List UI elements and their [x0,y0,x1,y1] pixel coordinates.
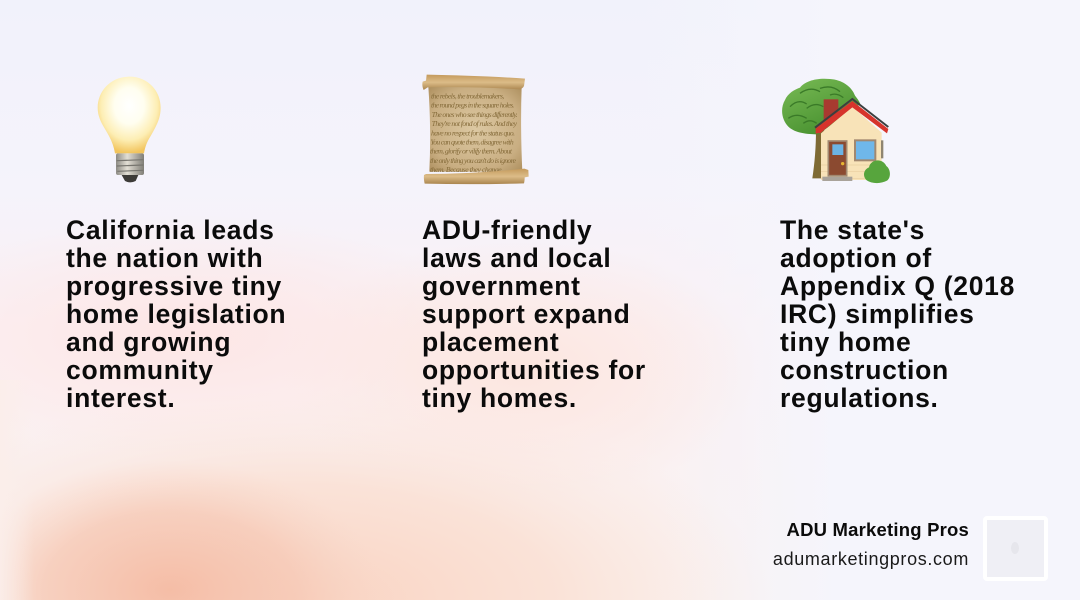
brand name: ADU Marketing Pros [787,519,969,540]
text block: Appendix Q: The state's [780,215,925,245]
text block: California: community [66,355,214,385]
text block: Appendix Q: IRC) simplifies [780,299,975,329]
logo placeholder [983,516,1048,581]
icon: parchment scroll: them, glorify or vilify them. About [430,147,513,156]
text block: California: the nation with [66,243,263,273]
icon: light bulb [98,76,161,182]
text block: ADU laws [422,215,646,413]
text block: Appendix Q: tiny home [780,327,911,357]
roof [816,101,888,134]
text block: California: California leads [66,215,275,245]
brand url: adumarketingpros.com [773,549,969,569]
icon: parchment scroll: them. Because they change [430,165,502,174]
icon: parchment scroll: The ones who see things differently. [432,110,518,119]
logo mark [1011,542,1019,554]
text block: ADU laws: laws and local [422,243,611,273]
text block: Appendix Q: construction [780,355,949,385]
icon: parchment scroll: You can quote them, disagree with [430,138,514,147]
text block: California [66,215,286,413]
text block: California: and growing [66,327,231,357]
text block: ADU laws: placement [422,327,559,357]
icon: parchment scroll: the round pegs in the square holes. [431,101,514,110]
house wall [821,107,882,180]
text block: Appendix Q: regulations. [780,383,939,413]
text block: ADU laws: support expand [422,299,631,329]
tree foliage [782,79,860,134]
icon: parchment scroll [422,74,529,184]
text block: California: progressive tiny [66,271,282,301]
text block: Appendix Q: Appendix Q (2018 [780,271,1015,301]
text block: ADU laws: ADU-friendly [422,215,592,245]
text block: ADU laws: tiny homes. [422,383,577,413]
chimney [824,99,838,120]
shutter [881,140,883,158]
text block: California: home legislation [66,299,286,329]
icon: parchment scroll: have no respect for the status quo. [431,128,515,137]
icon: parchment scroll: the rebels, the troublemakers, [431,91,504,100]
text block: ADU laws: opportunities for [422,355,646,385]
text block: Appendix Q [780,215,1015,413]
icon: parchment scroll: They're not fond of rules. And they [432,119,518,128]
tree trunk [812,130,824,178]
text block: California: interest. [66,383,175,413]
icon: house with tree [782,78,890,184]
text block: ADU laws: government [422,271,581,301]
step [822,177,852,181]
window [855,140,875,160]
icon: parchment scroll: the only thing you can't do is ignore [430,156,517,165]
bush [864,160,890,183]
text block: Appendix Q: adoption of [780,243,932,273]
door [828,141,847,176]
